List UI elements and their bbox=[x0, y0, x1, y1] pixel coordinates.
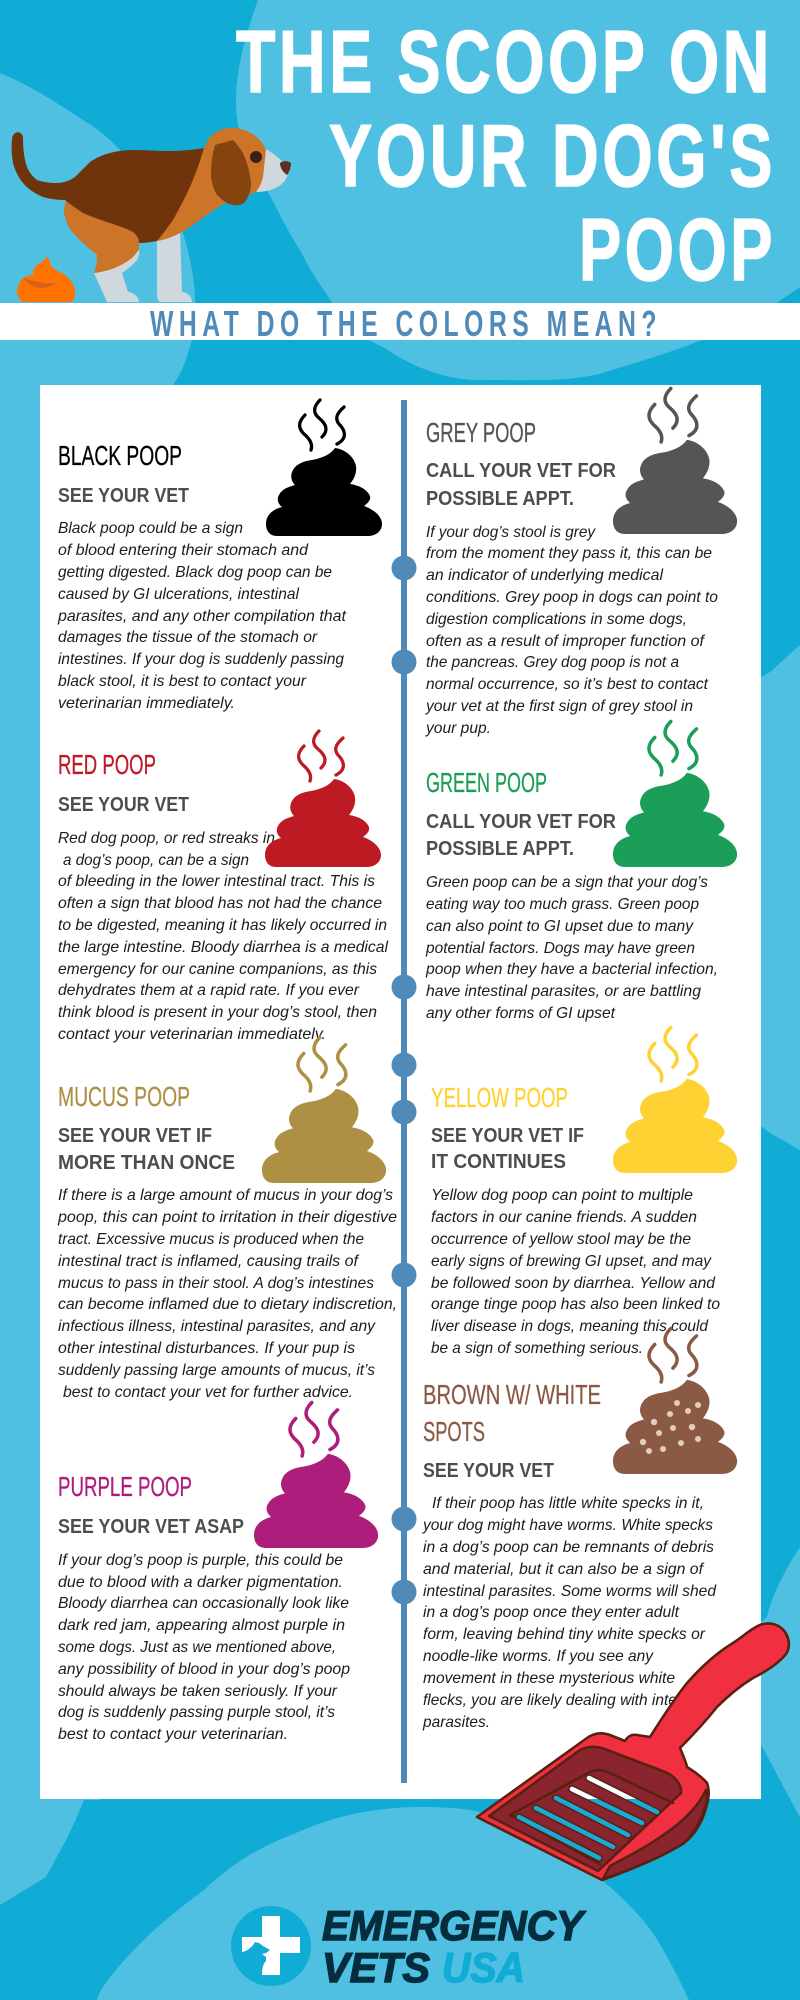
timeline bbox=[392, 400, 416, 1783]
text: green poop description bbox=[425, 874, 718, 1022]
advice: call your vet for possible appt: POSSIBLE APPT. bbox=[426, 838, 574, 860]
text: brown poop description: parasites. bbox=[422, 1714, 490, 1731]
dog rear leg lower bbox=[94, 250, 139, 302]
text: purple poop description: If your dog’s poop is purple, this could be bbox=[58, 1552, 343, 1569]
text: mucus poop description: can become inflamed due to dietary indiscretion, bbox=[58, 1296, 397, 1313]
text: brown poop description: your dog might have worms. White specks bbox=[422, 1517, 713, 1534]
text: grey poop description: normal occurrence, so it’s best to contact bbox=[426, 676, 709, 693]
logo wordmark bbox=[322, 1902, 587, 1991]
section: red poop bbox=[58, 749, 388, 1043]
dog saddle and tail bbox=[12, 132, 204, 243]
text: grey poop description: your vet at the first sign of grey stool in bbox=[425, 698, 693, 715]
text: brown poop description: in a dog’s poop once they enter adult bbox=[423, 1604, 680, 1621]
section: green poop bbox=[425, 767, 718, 1022]
text: brown poop description: flecks, you are likely dealing with intestinal bbox=[423, 1692, 713, 1709]
advice: call your vet for possible appt: CALL YOUR VET FOR bbox=[426, 460, 617, 482]
text: black poop description: veterinarian immediately. bbox=[58, 695, 235, 712]
text: black poop description: caused by GI ulcerations, intestinal bbox=[58, 586, 299, 603]
text: purple poop description: due to blood with a darker pigmentation. bbox=[58, 1574, 343, 1591]
text: brown poop description: noodle-like worms. If you see any bbox=[423, 1648, 654, 1665]
icon: yellow poop bbox=[613, 1027, 737, 1173]
text: mucus poop description: intestinal tract is inflamed, causing trails of bbox=[58, 1253, 360, 1270]
text: green poop description: have intestinal parasites, or are battling bbox=[426, 983, 701, 1000]
advice: call your vet for possible appt bbox=[426, 811, 617, 860]
text: green poop description: potential factors. Dogs may have green bbox=[425, 940, 695, 957]
dog ear bbox=[211, 140, 251, 205]
illustration: red litter scoop bbox=[477, 1623, 789, 1880]
dog chest and head bbox=[157, 128, 267, 241]
icon: orange poop bbox=[17, 256, 75, 302]
text: black poop description: parasites, and any other compilation that bbox=[57, 608, 347, 625]
text: red poop description bbox=[58, 830, 388, 1043]
heading: black poop: BLACK POOP bbox=[58, 440, 182, 471]
text: grey poop description: If your dog’s stool is grey bbox=[426, 524, 596, 541]
text: red poop description: think blood is present in your dog’s stool, then bbox=[58, 1004, 377, 1021]
dog nose bbox=[280, 161, 291, 175]
text: mucus poop description: suddenly passing large amounts of mucus, it’s bbox=[58, 1362, 375, 1379]
icon: black poop bbox=[266, 400, 382, 536]
text: green poop description: any other forms of GI upset bbox=[426, 1005, 616, 1022]
advice: call your vet for possible appt: CALL YOUR VET FOR bbox=[426, 811, 617, 833]
text: yellow poop description: factors in our canine friends. A sudden bbox=[431, 1209, 697, 1226]
heading: brown with white spots: SPOTS bbox=[423, 1416, 485, 1447]
logo pet silhouette bbox=[242, 1942, 270, 1975]
text: yellow poop description: liver disease in dogs, meaning this could bbox=[431, 1318, 709, 1335]
text: brown poop description: If their poop has little white specks in it, bbox=[432, 1495, 704, 1512]
text: brown poop description: form, leaving behind tiny white specks or bbox=[423, 1626, 706, 1643]
text: mucus poop description: If there is a large amount of mucus in your dog’s bbox=[58, 1187, 393, 1204]
text: brown poop description: and material, but it can also be a sign of bbox=[423, 1561, 705, 1578]
text: brown poop description: intestinal parasites. Some worms will shed bbox=[423, 1583, 717, 1600]
text: grey poop description: digestion complications in some dogs, bbox=[426, 611, 687, 628]
advice: see your vet if more than once bbox=[58, 1125, 235, 1174]
text: brown poop description: movement in these mysterious white bbox=[423, 1670, 675, 1687]
text: red poop description: emergency for our canine companions, as this bbox=[58, 961, 377, 978]
text: yellow poop description bbox=[431, 1187, 720, 1357]
dog front leg bbox=[157, 230, 192, 302]
advice: see your vet: SEE YOUR VET bbox=[58, 794, 189, 816]
text: brown poop description: in a dog’s poop can be remnants of debris bbox=[423, 1539, 714, 1556]
icon: brown poop with white spots bbox=[613, 1328, 737, 1474]
text: grey poop description: from the moment they pass it, this can be bbox=[426, 545, 712, 562]
advice: see your vet if it continues: SEE YOUR VET IF bbox=[431, 1125, 584, 1147]
text: purple poop description: some dogs. Just as we mentioned above, bbox=[58, 1639, 336, 1656]
text: black poop description bbox=[57, 520, 347, 712]
logo wordmark: EMERGENCY bbox=[322, 1902, 587, 1949]
text: purple poop description bbox=[58, 1552, 350, 1743]
text: green poop description: poop when they have a bacterial infection, bbox=[425, 961, 718, 978]
icon: purple poop bbox=[254, 1402, 378, 1548]
text: yellow poop description: be a sign of something serious. bbox=[431, 1340, 643, 1357]
text: purple poop description: dark red jam, appearing almost purple in bbox=[58, 1617, 345, 1634]
text: mucus poop description: mucus to pass in their stool. A dog’s intestines bbox=[58, 1275, 374, 1292]
text: red poop description: a dog’s poop, can be a sign bbox=[63, 852, 249, 869]
heading: red poop: RED POOP bbox=[58, 749, 156, 780]
advice: see your vet if it continues bbox=[431, 1125, 584, 1173]
advice: see your vet asap: SEE YOUR VET ASAP bbox=[58, 1516, 244, 1538]
text: purple poop description: dog is suddenly passing purple stool, it’s bbox=[58, 1704, 335, 1721]
heading: mucus poop: MUCUS POOP bbox=[58, 1081, 190, 1112]
scoop interior bbox=[489, 1747, 681, 1871]
text: grey poop description: an indicator of underlying medical bbox=[426, 567, 663, 584]
text: green poop description: can also point to GI upset due to many bbox=[426, 918, 694, 935]
icon: green poop bbox=[613, 721, 737, 867]
heading: purple poop: PURPLE POOP bbox=[58, 1471, 192, 1502]
text: green poop description: eating way too much grass. Green poop bbox=[426, 896, 699, 913]
heading: brown with white spots bbox=[423, 1379, 601, 1447]
text: purple poop description: should always be taken seriously. If your bbox=[58, 1683, 338, 1700]
text: mucus poop description: other intestinal disturbances. If your pup is bbox=[58, 1340, 355, 1357]
text: grey poop description: the pancreas. Grey dog poop is not a bbox=[426, 654, 679, 671]
advice: see your vet: SEE YOUR VET bbox=[423, 1460, 554, 1482]
text: mucus poop description: best to contact your vet for further advice. bbox=[63, 1384, 353, 1401]
dog hind leg bbox=[64, 195, 139, 273]
advice: see your vet: SEE YOUR VET bbox=[58, 485, 189, 507]
text: black poop description: getting digested. Black dog poop can be bbox=[58, 564, 332, 581]
icon: grey poop bbox=[613, 388, 737, 534]
dog muzzle bbox=[256, 149, 288, 192]
text: red poop description: of bleeding in the lower intestinal tract. This is bbox=[58, 873, 375, 890]
text: mucus poop description: infectious illness, intestinal parasites, and any bbox=[58, 1318, 376, 1335]
heading: green poop: GREEN POOP bbox=[426, 767, 547, 798]
text: red poop description: dehydrates them at a rapid rate. If you ever bbox=[58, 982, 360, 999]
text: red poop description: often a sign that blood has not had the chance bbox=[58, 895, 382, 912]
text: mucus poop description bbox=[57, 1187, 397, 1401]
heading: brown with white spots: BROWN W/ WHITE bbox=[423, 1379, 601, 1410]
white panel bbox=[40, 385, 761, 1799]
advice: see your vet if more than once: SEE YOUR VET IF bbox=[58, 1125, 212, 1147]
text: purple poop description: Bloody diarrhea can occasionally look like bbox=[58, 1595, 349, 1612]
text: black poop description: of blood entering their stomach and bbox=[58, 542, 309, 559]
logo: emergency vets usa bbox=[231, 1902, 587, 1991]
text: yellow poop description: early signs of brewing GI upset, and may bbox=[431, 1253, 712, 1270]
icon: mucus poop bbox=[262, 1037, 386, 1183]
scoop inner frame bbox=[510, 1770, 673, 1864]
illustration: dog bbox=[12, 128, 291, 302]
text: black poop description: black stool, it is best to contact your bbox=[58, 673, 307, 690]
icon: red poop bbox=[265, 731, 381, 867]
text: black poop description: Black poop could be a sign bbox=[58, 520, 243, 537]
text: grey poop description bbox=[425, 524, 718, 737]
text: red poop description: the large intestine. Bloody diarrhea is a medical bbox=[58, 939, 388, 956]
text: purple poop description: any possibility of blood in your dog’s poop bbox=[58, 1661, 350, 1678]
dog eye bbox=[250, 151, 262, 163]
logo wordmark: VETS bbox=[322, 1944, 430, 1991]
text: yellow poop description: be followed soon by diarrhea. Yellow and bbox=[431, 1275, 716, 1292]
heading: yellow poop: YELLOW POOP bbox=[431, 1082, 568, 1113]
text: mucus poop description: tract. Excessive mucus is produced when the bbox=[58, 1231, 364, 1248]
slot openings over panel bbox=[570, 1776, 636, 1799]
logo cross bbox=[242, 1916, 300, 1975]
advice: call your vet for possible appt: POSSIBLE APPT. bbox=[426, 488, 574, 510]
text: red poop description: to be digested, meaning it has likely occurred in bbox=[58, 917, 387, 934]
section: brown with white spots bbox=[422, 1379, 717, 1731]
logo wordmark: USA bbox=[442, 1944, 525, 1991]
logo circle bbox=[231, 1906, 311, 1986]
title bbox=[236, 12, 776, 299]
text: purple poop description: best to contact your veterinarian. bbox=[58, 1726, 288, 1743]
text: red poop description: Red dog poop, or red streaks in bbox=[58, 830, 275, 847]
text: yellow poop description: Yellow dog poop can point to multiple bbox=[431, 1187, 693, 1204]
section: black poop bbox=[57, 440, 347, 712]
text: grey poop description: conditions. Grey poop in dogs can point to bbox=[426, 589, 718, 606]
section: mucus poop bbox=[57, 1081, 397, 1401]
scoop side wall bbox=[603, 1790, 707, 1879]
section: purple poop bbox=[58, 1471, 350, 1743]
advice: call your vet for possible appt bbox=[426, 460, 617, 510]
advice: see your vet if more than once: MORE THAN ONCE bbox=[58, 1152, 235, 1174]
text: black poop description: intestines. If your dog is suddenly passing bbox=[58, 651, 344, 668]
advice: see your vet if it continues: IT CONTINUES bbox=[431, 1151, 566, 1173]
scoop body and handle bbox=[477, 1623, 789, 1880]
slot openings bbox=[519, 1778, 657, 1858]
section: grey poop bbox=[425, 417, 718, 737]
text: yellow poop description: occurrence of yellow stool may be the bbox=[431, 1231, 691, 1248]
text: red poop description: contact your veterinarian immediately. bbox=[58, 1026, 326, 1043]
text: grey poop description: your pup. bbox=[425, 720, 491, 737]
section: yellow poop bbox=[431, 1082, 720, 1357]
heading: grey poop: GREY POOP bbox=[426, 417, 536, 448]
text: yellow poop description: orange tinge poop has also been linked to bbox=[431, 1296, 720, 1313]
text: mucus poop description: poop, this can point to irritation in their digestive bbox=[57, 1209, 397, 1226]
text: green poop description: Green poop can be a sign that your dog’s bbox=[426, 874, 708, 891]
scoop slots bbox=[519, 1778, 657, 1858]
text: brown poop description bbox=[422, 1495, 717, 1731]
text: black poop description: damages the tissue of the stomach or bbox=[58, 629, 318, 646]
text: grey poop description: often as a result of improper function of bbox=[426, 633, 706, 650]
